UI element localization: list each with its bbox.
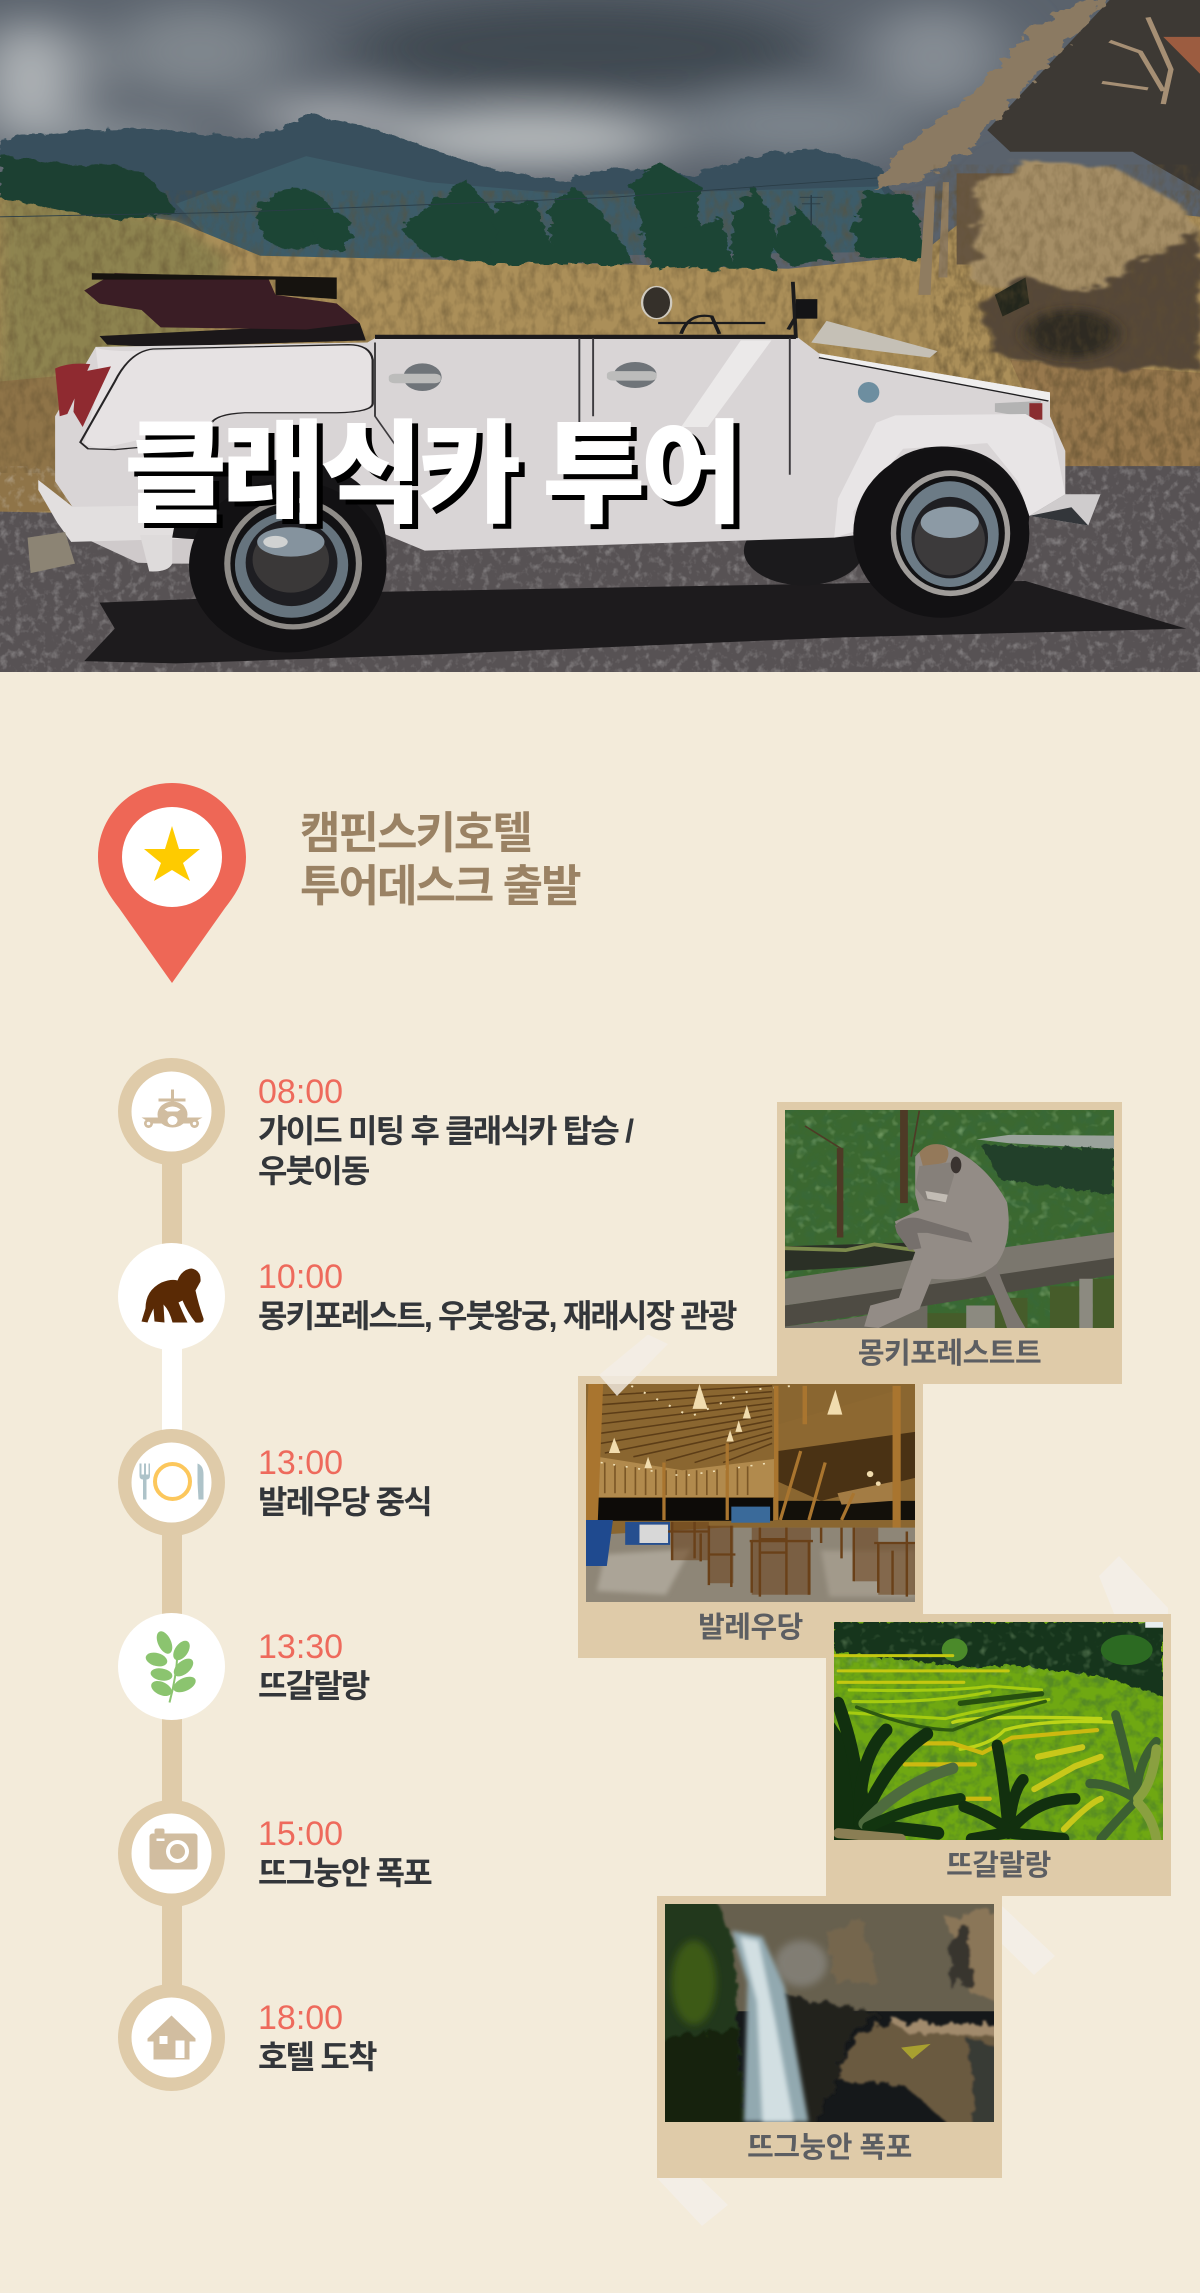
- door handles: [389, 362, 657, 391]
- gravel ground: [0, 466, 1200, 672]
- caption: 몽키포레스트트: [858, 1338, 1041, 1370]
- photo: Tegenungan waterfall: [665, 1904, 994, 2122]
- front fender: [834, 414, 1065, 538]
- icon: plate and cutlery: [118, 1429, 225, 1536]
- departure heading: [300, 809, 580, 911]
- caption: 뜨그눙안 폭포: [747, 2132, 912, 2164]
- step 15:00: 15:00: [258, 1814, 343, 1852]
- hero photo: classic white car in Bali landscape: [0, 0, 1200, 672]
- grass field: [0, 195, 1200, 516]
- step 15:00: 뜨그눙안 폭포: [258, 1854, 431, 1890]
- icon: monkey: [118, 1243, 225, 1349]
- step 18:00: 호텔 도착: [258, 2039, 376, 2075]
- photo card: restaurant: [578, 1376, 923, 1658]
- far wheel: [744, 516, 863, 585]
- step 13:00: 발레우당 중식: [258, 1484, 431, 1520]
- mirror: [642, 287, 671, 319]
- icon: house: [118, 1984, 225, 2091]
- door reflection stroke: [681, 340, 771, 427]
- step 08:00: [118, 1058, 634, 1189]
- thatched hut: [872, 0, 1200, 373]
- step 13:30: [118, 1613, 370, 1720]
- tail lights: [55, 364, 111, 427]
- step 13:00: [118, 1429, 431, 1536]
- wheel arches: [172, 460, 387, 559]
- front wheel: [853, 449, 1029, 618]
- departure pin icon: [98, 783, 246, 983]
- hood: [819, 353, 1050, 401]
- folded roof: [99, 323, 366, 347]
- step 13:30: 뜨갈랄랑: [258, 1668, 369, 1704]
- photo: bamboo dining hall: [586, 1384, 915, 1602]
- step 08:00: 가이드 미팅 후 클래식카 탑승 /: [258, 1113, 632, 1149]
- rear bumper, skirt and exhaust: [88, 538, 321, 564]
- departure heading: 투어데스크 출발: [300, 862, 580, 911]
- hero title: 클래식카 투어: [124, 412, 738, 537]
- monkey: [864, 1144, 1025, 1328]
- step 08:00: 08:00: [258, 1073, 343, 1111]
- photo: Tegallalang rice terraces and palms: [834, 1622, 1163, 1840]
- caption: 발레우당: [698, 1612, 803, 1644]
- photo card: rice terrace: [826, 1614, 1171, 1896]
- body: [55, 336, 1065, 551]
- icon: airplane: [118, 1058, 225, 1164]
- step 13:00: 13:00: [258, 1444, 343, 1482]
- photo: monkey on railing: [785, 1110, 1114, 1328]
- white classic car: [28, 273, 1101, 652]
- step 10:00: [118, 1243, 736, 1349]
- car shadow: [84, 581, 1186, 663]
- photo card: monkey forest: [777, 1102, 1122, 1384]
- caption: 뜨갈랄랑: [946, 1850, 1051, 1882]
- clouds: [0, 0, 1003, 169]
- timeline: 우붓이동: [258, 1153, 369, 1189]
- decorative pale diagonal stroke over restaurant card: [600, 1335, 668, 1396]
- palms: [834, 1703, 1156, 1840]
- step 10:00: 몽키포레스트, 우붓왕궁, 재래시장 관광: [258, 1298, 736, 1334]
- step 13:30: 13:30: [258, 1628, 343, 1666]
- icon: rice plant leaf: [118, 1613, 225, 1720]
- step 15:00: [118, 1800, 432, 1906]
- icon: camera: [118, 1800, 225, 1906]
- trees: [0, 156, 930, 269]
- departure heading: 캠핀스키호텔: [300, 809, 531, 858]
- timeline: [118, 1058, 736, 2091]
- photo card: waterfall: [657, 1896, 1002, 2178]
- connector lines: [162, 1164, 182, 1985]
- step 18:00: 18:00: [258, 1999, 343, 2037]
- mountains: [0, 115, 918, 260]
- step 10:00: 10:00: [258, 1258, 343, 1296]
- step 18:00: [118, 1984, 377, 2091]
- rear wheel: [189, 480, 386, 652]
- utility pole: [0, 178, 880, 225]
